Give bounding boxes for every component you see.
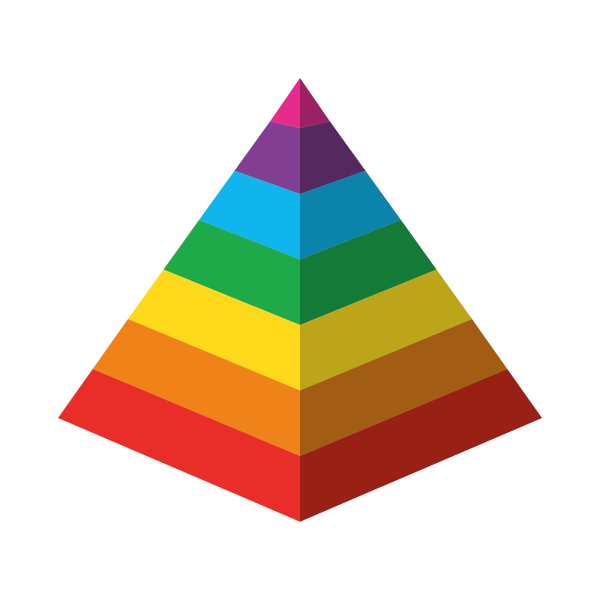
pyramid layer 7: red xyxy=(58,369,542,522)
pyramid layer 5: yellow xyxy=(128,270,472,390)
pyramid layer 4: green xyxy=(164,220,436,325)
pyramid layer 6: orange xyxy=(93,319,507,456)
pyramid layer 1: pink xyxy=(270,78,330,128)
pyramid layer 3: blue xyxy=(199,171,401,260)
pyramid layer 2: purple xyxy=(234,122,366,194)
